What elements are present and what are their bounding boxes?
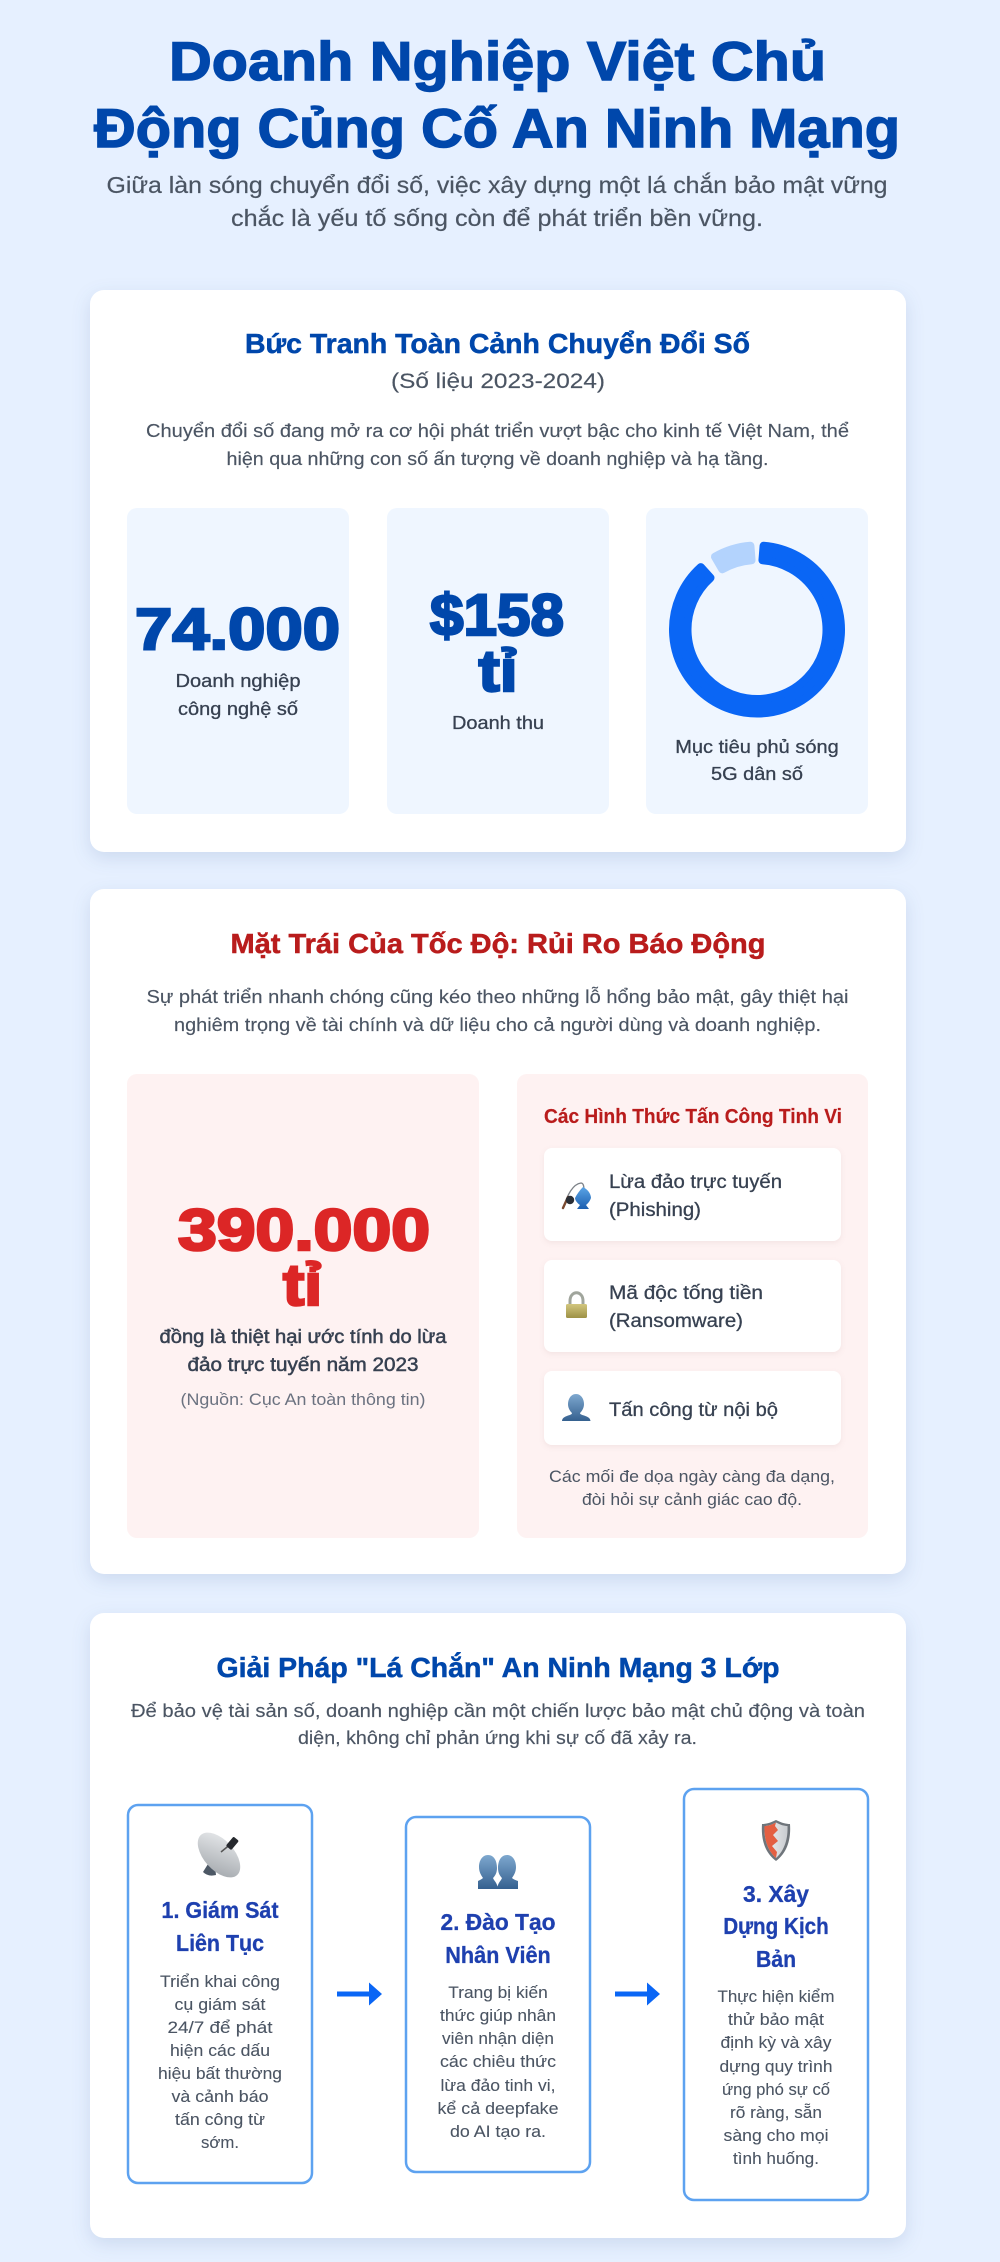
overview description	[146, 420, 849, 469]
stat card: digital companies: Doanh nghiệp	[176, 670, 300, 691]
step 1: monitoring: 24/7 để phát	[168, 2018, 273, 2037]
icon: person silhouette	[562, 1394, 590, 1421]
step 3: playbook: Bản	[756, 1946, 796, 1972]
doughnut chart: 5G coverage	[673, 546, 841, 714]
step 3: playbook: rõ ràng, sẵn	[730, 2103, 822, 2122]
step 2: training: lừa đảo tinh vi,	[440, 2076, 556, 2095]
panel: solutions	[90, 1613, 906, 2238]
header title: Động Củng Cố An Ninh Mạng	[94, 97, 900, 159]
icon: two people	[478, 1855, 518, 1889]
panel: attack types	[517, 1074, 868, 1538]
attack item: insider: Tấn công từ nội bộ	[609, 1399, 778, 1421]
step 1: monitoring: Triển khai công	[160, 1972, 280, 1991]
step 2: training: thức giúp nhân	[440, 2006, 556, 2025]
panel: digital transformation overview	[90, 290, 906, 852]
section heading: risks: Mặt Trái Của Tốc Độ: Rủi Ro Báo Động	[230, 928, 766, 959]
step 2: training: Nhân Viên	[445, 1942, 551, 1968]
stat card: revenue: $158	[430, 583, 564, 648]
stat card: digital companies: 74.000	[135, 597, 340, 662]
stat card: 5G coverage	[646, 508, 868, 814]
step 1: monitoring	[128, 1805, 312, 2183]
step 1: monitoring: hiện các dấu	[170, 2041, 270, 2060]
stat card: digital companies	[127, 508, 349, 814]
attack types note	[549, 1467, 835, 1509]
step 3: playbook: sàng cho mọi	[724, 2126, 828, 2145]
solutions description	[131, 1700, 865, 1748]
step 3: playbook: ứng phó sự cố	[722, 2080, 831, 2099]
step 3: playbook: Thực hiện kiểm	[718, 1987, 834, 2006]
step 3: playbook: thử bảo mật	[728, 2010, 824, 2029]
step 1: monitoring: sớm.	[201, 2133, 239, 2152]
stat card: 5G coverage: Mục tiêu phủ sóng	[675, 736, 839, 757]
step 3: playbook: tình huống.	[733, 2149, 819, 2168]
risks description: nghiêm trọng về tài chính và dữ liệu cho cả người dùng và doanh nghiệp.	[174, 1014, 821, 1035]
stat panel: fraud losses: (Nguồn: Cục An toàn thông tin)	[180, 1391, 426, 1409]
step 2: training: 2. Đào Tạo	[440, 1909, 556, 1935]
step 2: training: các chiêu thức	[440, 2052, 557, 2071]
header subtitle: Giữa làn sóng chuyển đổi số, việc xây dựng một lá chắn bảo mật vững	[106, 172, 888, 198]
header subtitle	[106, 172, 888, 231]
icon: padlock	[566, 1293, 587, 1318]
step 2: training: viên nhận diện	[442, 2029, 554, 2048]
step 3: playbook: dựng quy trình	[720, 2057, 832, 2076]
arrow: step 1 to step 2	[337, 1982, 382, 2006]
attack types note: Các mối đe dọa ngày càng đa dạng,	[549, 1467, 835, 1486]
stat panel: fraud losses: đồng là thiệt hại ước tính do lừa	[160, 1327, 447, 1348]
attack types heading: Các Hình Thức Tấn Công Tinh Vi	[544, 1106, 842, 1128]
panel: risks	[90, 889, 906, 1574]
section heading: solutions: Giải Pháp "Lá Chắn" An Ninh Mạng 3 Lớp	[216, 1652, 780, 1683]
stat card: digital companies: công nghệ số	[178, 698, 298, 719]
step 3: playbook: định kỳ và xây	[720, 2033, 832, 2052]
step 1: monitoring: cụ giám sát	[174, 1995, 266, 2014]
stat panel: fraud losses: tỉ	[283, 1253, 322, 1318]
stat card: 5G coverage: 5G dân số	[711, 763, 803, 784]
icon: fishing rod and fish	[563, 1183, 591, 1209]
attack item: phishing: (Phishing)	[609, 1199, 701, 1221]
stat panel: fraud losses: 390.000	[178, 1198, 430, 1263]
attack item: phishing: Lừa đảo trực tuyến	[609, 1171, 782, 1193]
overview description: hiện qua những con số ấn tượng về doanh nghiệp và hạ tầng.	[226, 448, 768, 469]
attack item: insider	[544, 1371, 841, 1445]
step 2: training	[406, 1817, 590, 2172]
header subtitle: chắc là yếu tố sống còn để phát triển bền vững.	[231, 205, 763, 231]
attack item: ransomware	[544, 1260, 841, 1352]
arrow: step 2 to step 3	[615, 1982, 660, 2006]
risks description: Sự phát triển nhanh chóng cũng kéo theo những lỗ hổng bảo mật, gây thiệt hại	[146, 986, 848, 1007]
step 2: training: Trang bị kiến	[448, 1983, 548, 2002]
stat card: revenue	[387, 508, 609, 814]
attack types note: đòi hỏi sự cảnh giác cao độ.	[582, 1490, 802, 1509]
step 1: monitoring: hiệu bất thường	[158, 2064, 282, 2083]
stat panel: fraud losses: đảo trực tuyến năm 2023	[188, 1355, 418, 1376]
stat card: revenue: Doanh thu	[452, 712, 544, 733]
attack item: phishing	[544, 1148, 841, 1241]
step 1: monitoring: Liên Tục	[176, 1930, 264, 1956]
attack item: ransomware: Mã độc tống tiền	[609, 1282, 763, 1304]
step 1: monitoring: và cảnh báo	[172, 2087, 268, 2106]
section heading: overview: Bức Tranh Toàn Cảnh Chuyển Đổi Số	[245, 328, 750, 359]
stat card: revenue: tỉ	[478, 639, 518, 704]
step 2: training: do AI tạo ra.	[450, 2122, 546, 2141]
header title: Doanh Nghiệp Việt Chủ	[169, 30, 826, 92]
attack item: ransomware: (Ransomware)	[609, 1310, 743, 1332]
step 2: training: kể cả deepfake	[438, 2099, 558, 2118]
icon: shield	[762, 1820, 790, 1861]
solutions description: diện, không chỉ phản ứng khi sự cố đã xảy ra.	[298, 1727, 697, 1748]
stat panel: fraud losses	[127, 1074, 479, 1538]
step 3: playbook: Dựng Kịch	[723, 1913, 829, 1939]
icon: satellite dish	[190, 1825, 248, 1885]
header title	[94, 30, 900, 159]
risks description	[146, 986, 848, 1035]
step 1: monitoring: tấn công từ	[175, 2110, 265, 2129]
data years note: (Số liệu 2023-2024)	[391, 370, 605, 393]
step 1: monitoring: 1. Giám Sát	[162, 1897, 279, 1923]
step 3: playbook: 3. Xây	[743, 1881, 809, 1907]
overview description: Chuyển đổi số đang mở ra cơ hội phát triển vượt bậc cho kinh tế Việt Nam, thể	[146, 420, 849, 441]
solutions description: Để bảo vệ tài sản số, doanh nghiệp cần một chiến lược bảo mật chủ động và toàn	[131, 1700, 865, 1721]
step 3: playbook	[684, 1789, 868, 2200]
